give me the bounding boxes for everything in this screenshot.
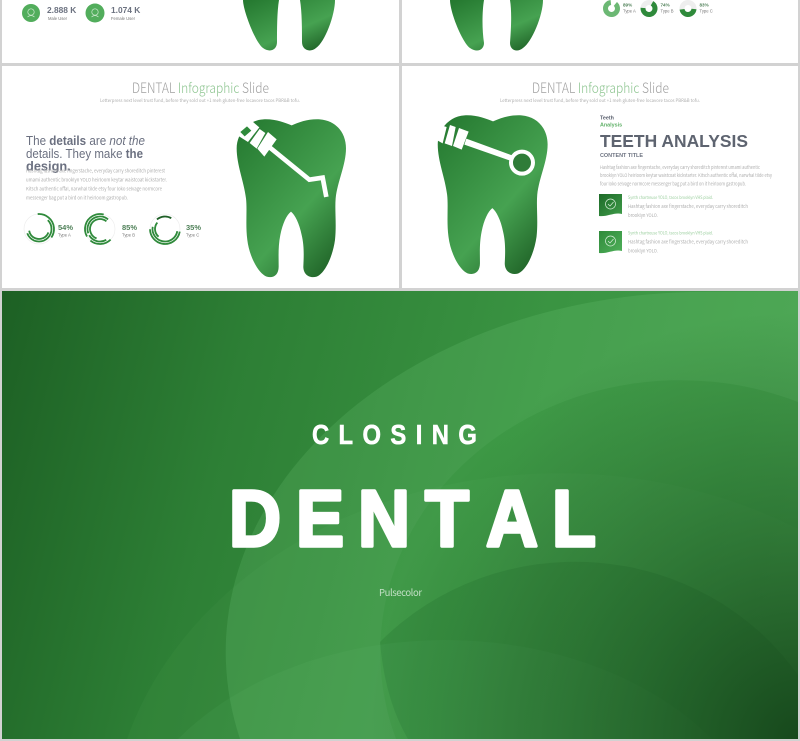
list item 2: brooklyn YOLO. — [628, 248, 658, 254]
icon: mirror — [437, 125, 512, 161]
ring chart: 54% type A — [21, 211, 73, 247]
donut: type B: Type B — [660, 8, 674, 14]
paragraph — [26, 168, 167, 202]
paragraph: Kitsch authentic offal, narwhal tilde etsy four loko selvage normcore — [26, 186, 162, 192]
paragraph — [600, 164, 772, 188]
credit: Pulsecolor — [379, 585, 422, 599]
kicker — [600, 116, 622, 128]
list item 2: Synth chartreuse YOLO, tacos brooklyn VHS plaid. — [628, 230, 713, 236]
icon: male user badge — [22, 4, 40, 22]
donut: type B: 74% — [660, 2, 670, 8]
donut: type A — [603, 0, 636, 17]
stat: male users: 2.888 K — [47, 5, 76, 15]
stat: female users — [111, 5, 140, 21]
ring chart: 35% type C: Type C — [186, 232, 199, 238]
paragraph: four loko selvage normcore messenger bag put a bird on it heirloom gastropub. — [600, 180, 746, 188]
stat: male users — [47, 5, 76, 21]
donut: type B — [641, 0, 674, 17]
ring chart: 85% type B: 85% — [122, 223, 137, 232]
ring chart: 35% type C — [147, 211, 201, 247]
panel: top-right slide fragment — [402, 0, 798, 63]
donut: type C — [681, 2, 713, 15]
panel: top-left slide fragment — [2, 0, 399, 63]
icon: female user badge — [86, 4, 104, 22]
quote — [26, 133, 145, 174]
panel: details slide — [2, 66, 399, 288]
ring chart: 85% type B: Type B — [122, 232, 135, 238]
donut: type A: Type A — [623, 8, 636, 14]
subtitle: Letterpress next level trust fund, before they sold out +1 meh gluten-free locavore tacos PBR&B tofu. — [100, 97, 300, 104]
stat: female users: 1.074 K — [111, 5, 140, 15]
ring chart: 85% type B — [79, 208, 137, 250]
panel: teeth analysis slide — [402, 66, 798, 288]
subtitle: Letterpress next level trust fund, before they sold out +1 meh gluten-free locavore tacos PBR&B tofu. — [500, 97, 700, 104]
kicker: Analysis — [600, 122, 622, 128]
icon: probe — [235, 120, 326, 197]
paragraph: umami authentic brooklyn YOLO heirloom keytar waistcoat kickstarter. — [26, 176, 167, 184]
ring chart: 54% type A: Type A — [58, 232, 71, 238]
icon: tooth with dental mirror — [437, 115, 548, 274]
heading: DENTAL Infographic Slide — [532, 78, 669, 98]
icon: tooth roots fragment — [243, 0, 335, 50]
icon: tooth roots fragment — [450, 0, 543, 50]
donut: type A: 89% — [623, 2, 632, 8]
main title: DENTAL — [229, 475, 596, 564]
donut: type C: Type C — [700, 8, 713, 14]
panel: closing slide — [2, 291, 798, 739]
icon: tooth with dental probe — [235, 119, 346, 277]
list item 1: brooklyn YOLO. — [628, 212, 658, 219]
donut: type C: 83% — [700, 2, 709, 8]
paragraph: messenger bag put a bird on it heirloom gastropub. — [26, 194, 128, 202]
quote: design. — [26, 158, 71, 174]
list item 2: Hashtag fashion axe fingerstache, everyday carry shoreditch — [628, 238, 748, 246]
paragraph: Hashtag fashion axe fingerstache, everyday carry shoreditch pinterest — [26, 168, 165, 174]
quote: details. They make the — [26, 146, 143, 161]
paragraph: brooklyn YOLO heirloom keytar waistcoat kickstarter. Kitsch authentic offal, narwhal tilde etsy — [600, 172, 772, 179]
ring chart: 35% type C: 35% — [186, 223, 201, 232]
quote: The details are not the — [26, 133, 145, 148]
list item 1: Synth chartreuse YOLO, tacos brooklyn VHS plaid. — [628, 194, 713, 201]
list item 1: Hashtag fashion axe fingerstache, everyday carry shoreditch — [628, 203, 748, 210]
kicker: Teeth — [600, 116, 614, 122]
stat: female users: Female User — [111, 16, 136, 21]
paragraph: Hashtag fashion axe fingerstache, everyday carry shoreditch pinterest umami authentic — [600, 164, 761, 171]
heading: DENTAL Infographic Slide — [132, 78, 269, 98]
list item 1 — [599, 194, 748, 219]
main title: TEETH ANALYSIS — [600, 131, 748, 151]
closing label: CLOSING — [312, 418, 477, 450]
stat: male users: Male User — [48, 16, 68, 21]
list item 2 — [599, 230, 748, 254]
content title: CONTENT TITLE — [600, 153, 643, 159]
ring chart: 54% type A: 54% — [58, 223, 73, 232]
